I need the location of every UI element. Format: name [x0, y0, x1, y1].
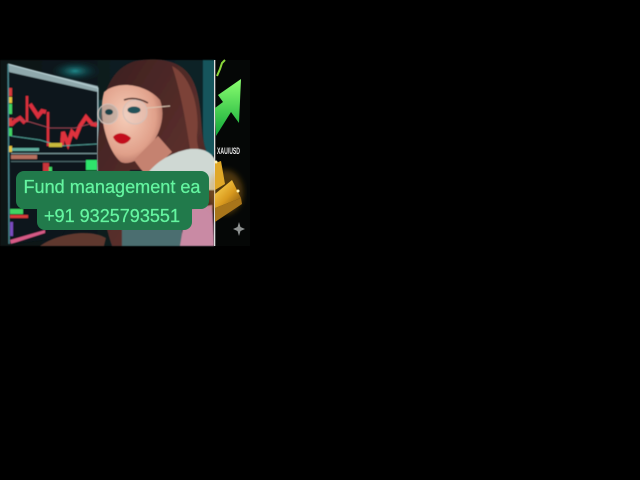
face — [102, 85, 162, 163]
caption line 2: +91 9325793551 — [44, 206, 180, 226]
glasses — [98, 99, 170, 124]
neck — [134, 136, 172, 176]
hair — [98, 59, 214, 246]
icon: sparkle — [233, 222, 245, 236]
icon: green up arrow — [215, 79, 241, 136]
candlestick line chart — [11, 96, 97, 147]
caption line 1: Fund management ea — [24, 177, 201, 197]
lips — [113, 133, 131, 144]
woman portrait — [40, 59, 215, 246]
icon: gold bars — [207, 160, 243, 222]
right panel: gold chart — [207, 60, 250, 246]
indicator panel — [11, 148, 98, 172]
label: XAU/USD: XAU/USD — [217, 146, 240, 156]
hoodie — [146, 149, 215, 190]
background scene — [0, 60, 215, 246]
caption box — [16, 171, 209, 230]
side ticks — [9, 88, 45, 244]
trading monitor — [8, 64, 98, 244]
